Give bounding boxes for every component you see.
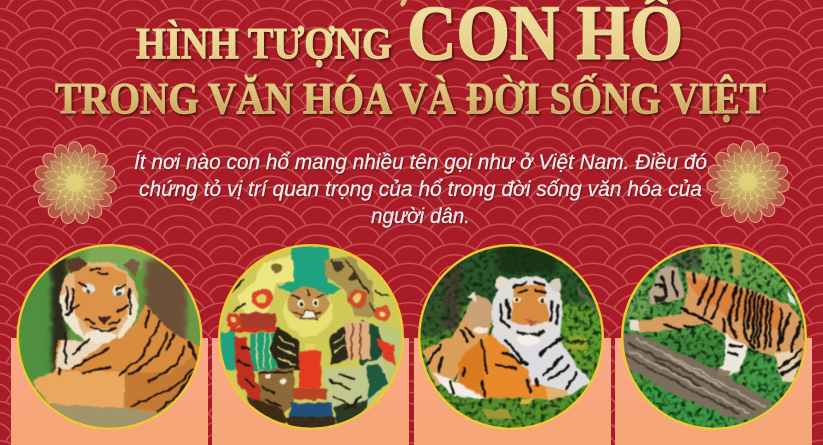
intro text: Ít nơi nào con hổ mang nhiều tên gọi như ở Việt Nam. Điều đó	[134, 151, 707, 174]
panel 2	[212, 338, 409, 445]
photo: seated tiger	[18, 246, 200, 428]
decorative gold star at top	[400, 0, 407, 7]
intro text	[134, 151, 707, 228]
photo: tiger with cub	[420, 246, 602, 428]
photo: folk painting of tigers	[220, 246, 402, 428]
intro text: người dân.	[371, 205, 470, 228]
photo: tiger walking over log	[623, 246, 805, 428]
title line: Hình tượng: HÌNH TƯỢNG	[136, 19, 392, 68]
title	[55, 0, 766, 123]
ring: walking tiger	[622, 245, 806, 429]
ring: folk painting	[219, 245, 403, 429]
ring: tiger with cub	[419, 245, 603, 429]
ring: tiger photo 1	[18, 245, 201, 429]
icon: right gold flower	[706, 141, 790, 224]
panel 3	[414, 338, 611, 445]
panel 1	[11, 338, 208, 445]
icon: left gold flower	[33, 142, 117, 225]
panel 4	[615, 338, 812, 445]
intro text: chứng tỏ vị trí quan trọng của hổ trong đời sống văn hóa của	[139, 178, 702, 201]
